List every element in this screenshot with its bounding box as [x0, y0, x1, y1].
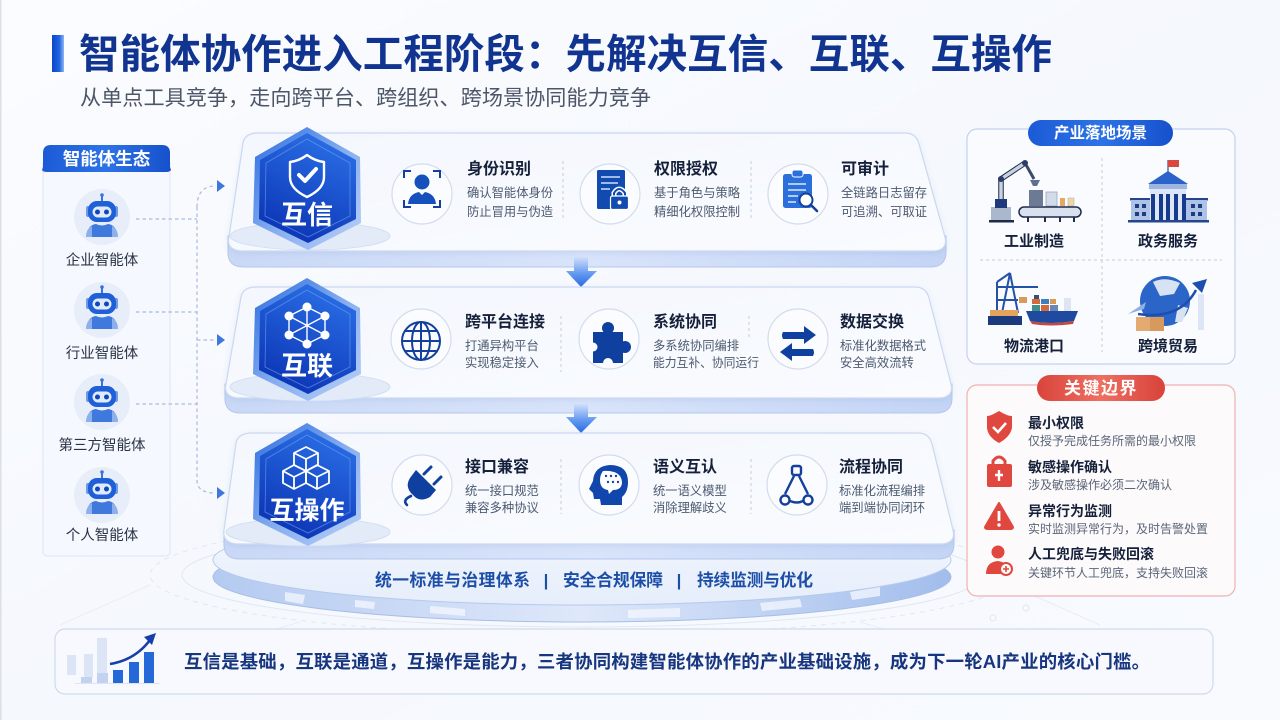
item: identity: 防止冒用与伪造 [467, 204, 553, 219]
item: process: 流程协同 [839, 457, 903, 476]
icon: lock [987, 457, 1012, 487]
hexagon badge [253, 423, 361, 546]
platform text: 安全合规保障 [563, 570, 663, 590]
item: auditable [768, 159, 927, 224]
platform text: 持续监测与优化 [697, 570, 813, 590]
scene: trade: 跨境贸易 [1138, 337, 1198, 355]
item: auditable: 可审计 [841, 159, 889, 178]
icon: document lock [597, 170, 628, 210]
icon: plug [405, 467, 441, 505]
boundary: human fallback [986, 546, 1208, 580]
item: semantic: 统一语义模型 [653, 484, 727, 498]
base platform [60, 515, 1100, 640]
bar body [55, 629, 1213, 694]
item: semantic: 消除理解歧义 [653, 500, 727, 515]
platform rim [213, 532, 951, 622]
panel header: 智能体生态 [63, 149, 151, 169]
scene: government: 政务服务 [1138, 232, 1198, 250]
panel header: 产业落地场景 [1054, 124, 1147, 142]
card surface [225, 287, 952, 398]
left frame edge [0, 0, 2, 720]
agent: industry [66, 282, 139, 362]
layer card: 互信 [228, 127, 946, 267]
boundary: anomaly monitoring: 异常行为监测 [1028, 503, 1112, 519]
scene: manufacturing [989, 160, 1081, 250]
platform text [375, 570, 813, 590]
pedestal ellipse [230, 222, 390, 250]
item: auditable: 可追溯、可取证 [841, 204, 927, 219]
icon: head with speech [589, 465, 628, 505]
icon: identity frame [404, 171, 440, 207]
item: process [767, 455, 925, 515]
icon: person with badge [986, 546, 1012, 575]
item: interface: 统一接口规范 [465, 483, 539, 498]
card slab [228, 236, 946, 267]
item: semantic [579, 455, 727, 515]
item: identity: 确认智能体身份 [467, 185, 553, 200]
boundary: least privilege: 仅授予完成任务所需的最小权限 [1028, 433, 1196, 448]
item: system collaboration: 多系统协同编排 [653, 338, 739, 353]
item: cross-platform: 打通异构平台 [465, 338, 539, 353]
item: system collaboration: 能力互补、协同运行 [653, 355, 759, 370]
platform top surface [213, 515, 951, 605]
panel header [1028, 120, 1173, 146]
card surface [224, 433, 954, 544]
icon: robot arm and conveyor [989, 160, 1081, 222]
scene: logistics [988, 273, 1078, 355]
item: cross-platform: 实现稳定接入 [465, 355, 539, 370]
title text: 智能体协作进入工程阶段：先解决互信、互联、互操作 [79, 31, 1052, 77]
item: interface [392, 455, 539, 515]
agent: personal: 个人智能体 [66, 527, 139, 544]
boundary: human fallback: 人工兜底与失败回滚 [1028, 546, 1154, 562]
item: semantic: 语义互认 [653, 458, 717, 476]
scene: logistics: 物流港口 [1004, 337, 1064, 355]
boundary: least privilege [987, 411, 1196, 448]
icon: clipboard search [783, 170, 817, 211]
scene: manufacturing: 工业制造 [1004, 233, 1064, 250]
arrow: 互联 to 互操作 [566, 403, 597, 433]
item: authorization: 基于角色与策略 [654, 185, 741, 200]
icon: shield check [987, 411, 1012, 443]
agent: third party [58, 374, 146, 454]
panel body [967, 385, 1235, 596]
panel body [967, 129, 1235, 364]
icon: warning triangle [985, 503, 1013, 529]
boundary: anomaly monitoring: 实时监测异常行为，及时告警处置 [1028, 521, 1208, 536]
boundary: human fallback: 关键环节人工兜底，支持失败回滚 [1028, 565, 1208, 580]
icon: crane and ship [988, 273, 1078, 326]
panel: key boundaries [967, 375, 1235, 596]
scene: trade [1128, 276, 1207, 355]
item: identity: 身份识别 [467, 160, 531, 178]
platform text: 统一标准与治理体系 [375, 570, 530, 590]
item: system collaboration: 系统协同 [653, 312, 717, 331]
card surface [228, 133, 946, 251]
layer card: 互联 [225, 278, 952, 413]
item: data exchange: 标准化数据格式 [840, 338, 926, 353]
icon: exchange arrows [780, 326, 816, 361]
icon: network [284, 302, 330, 348]
title [52, 31, 1052, 77]
platform text: | [544, 571, 548, 590]
agent: personal [66, 467, 139, 544]
agent: industry: 行业智能体 [66, 345, 139, 362]
platform text: | [677, 571, 681, 590]
item: process: 标准化流程编排 [839, 483, 925, 498]
panel dividers [980, 158, 1222, 352]
panel: industry scenarios [967, 120, 1235, 364]
hexagon badge: 互信 [281, 200, 333, 230]
agent: enterprise [66, 189, 139, 269]
icon: cubes [283, 447, 329, 489]
scene: government [1128, 160, 1209, 250]
item: cross-platform: 跨平台连接 [465, 312, 545, 331]
subtitle: 从单点工具竞争，走向跨平台、跨组织、跨场景协同能力竞争 [80, 86, 651, 110]
item: data exchange: 数据交换 [840, 312, 904, 331]
panel body [43, 160, 170, 556]
icon: growth chart [67, 633, 160, 684]
item: identity [392, 160, 553, 224]
card slab [225, 384, 952, 413]
agent: third party: 第三方智能体 [58, 436, 146, 454]
hexagon badge: 互联 [281, 351, 333, 381]
icon: shield [290, 155, 324, 197]
item: authorization: 精细化权限控制 [654, 205, 740, 219]
decorative rings [60, 515, 1100, 640]
item: system collaboration [579, 309, 759, 370]
item: auditable: 全链路日志留存 [841, 185, 927, 200]
item: process: 端到端协同闭环 [839, 500, 925, 515]
agent: enterprise: 企业智能体 [66, 251, 139, 269]
icon: government building [1128, 160, 1209, 222]
summary text: 互信是基础，互联是通道，互操作是能力，三者协同构建智能体协作的产业基础设施，成为下一轮AI产业的核心门槛。 [184, 651, 1150, 672]
title accent bar [52, 35, 64, 72]
item: data exchange [768, 309, 926, 370]
rim light segments [285, 587, 880, 618]
boundary: sensitive confirmation [987, 457, 1172, 492]
item: authorization [580, 159, 741, 224]
panel: agent ecosystem [42, 145, 171, 556]
layer card: 互操作 [224, 423, 954, 559]
item: authorization: 权限授权 [654, 159, 718, 178]
item: data exchange: 安全高效流转 [840, 355, 914, 370]
boundary: least privilege: 最小权限 [1028, 415, 1084, 431]
boundary: sensitive confirmation: 涉及敏感操作必须二次确认 [1028, 477, 1172, 492]
boundary: anomaly monitoring [985, 503, 1208, 536]
arrow: 互信 to 互联 [566, 256, 597, 287]
icon: globe [402, 322, 440, 360]
icon: process triangle [780, 466, 812, 504]
boundary: sensitive confirmation: 敏感操作确认 [1028, 459, 1112, 475]
card slab [224, 530, 954, 559]
icon: puzzle [588, 322, 631, 368]
connector arrows from agents to layers [136, 180, 225, 499]
item: interface: 兼容多种协议 [465, 500, 539, 515]
pedestal ellipse [226, 518, 390, 546]
hexagon badge: 互操作 [269, 497, 345, 525]
item: interface: 接口兼容 [465, 457, 529, 476]
panel header [42, 145, 171, 172]
bottom summary bar [55, 629, 1213, 694]
panel header: 关键边界 [1064, 379, 1138, 398]
hexagon badge [253, 278, 361, 401]
item: cross-platform [391, 309, 545, 370]
panel header [1037, 375, 1165, 401]
pedestal ellipse [230, 373, 390, 401]
hexagon badge [253, 127, 361, 250]
icon: globe, boxes and arrow [1128, 276, 1207, 331]
